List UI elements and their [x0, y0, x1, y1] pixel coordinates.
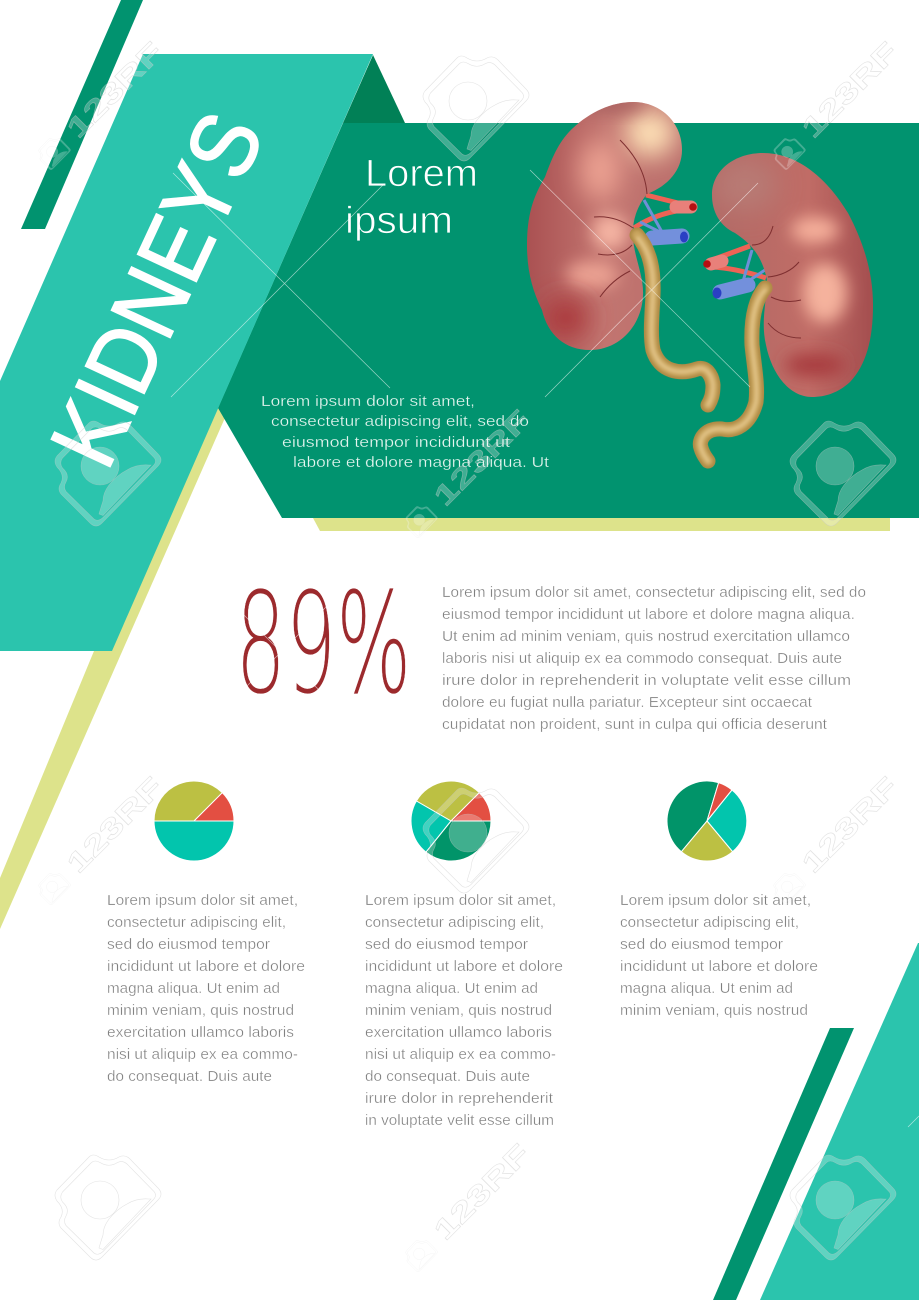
column text 2: nisi ut aliquip ex ea commo- — [365, 1047, 556, 1063]
big statistic: 89% — [236, 561, 411, 725]
column text 3: minim veniam, quis nostrud — [620, 1003, 808, 1019]
column text 1: incididunt ut labore et dolore — [107, 959, 305, 975]
column text 3: consectetur adipiscing elit, — [620, 915, 799, 931]
pie chart 2 — [411, 781, 491, 861]
column text 2: incididunt ut labore et dolore — [365, 959, 563, 975]
column text 1: consectetur adipiscing elit, — [107, 915, 286, 931]
statistic paragraph: dolore eu fugiat nulla pariatur. Excepteur sint occaecat — [442, 695, 812, 711]
statistic paragraph: cupidatat non proident, sunt in culpa qui officia deserunt — [442, 717, 827, 733]
top-left dark green stripe — [21, 0, 143, 229]
column text 2: Lorem ipsum dolor sit amet, — [365, 893, 556, 909]
column text 2: irure dolor in reprehenderit — [365, 1091, 553, 1107]
lime diagonal band — [0, 395, 235, 929]
panel text block: consectetur adipiscing elit, sed do — [271, 414, 529, 430]
column text 2: minim veniam, quis nostrud — [365, 1003, 552, 1019]
ribbon: title band — [0, 54, 373, 651]
statistic paragraph: eiusmod tempor incididunt ut labore et dolore magna aliqua. — [442, 607, 855, 623]
bottom-right dark green stripe — [713, 1028, 854, 1300]
column text 2: do consequat. Duis aute — [365, 1069, 530, 1085]
column text 1: Lorem ipsum dolor sit amet, — [107, 893, 298, 909]
column text 2 — [365, 893, 563, 1129]
statistic paragraph: laboris nisi ut aliquip ex ea commodo consequat. Duis aute — [442, 651, 842, 667]
left kidney — [527, 96, 682, 350]
right kidney vessels — [703, 246, 766, 298]
column text 2: sed do eiusmod tempor — [365, 937, 528, 953]
column text 1: minim veniam, quis nostrud — [107, 1003, 294, 1019]
column text 2: exercitation ullamco laboris — [365, 1025, 552, 1041]
right kidney — [712, 153, 873, 397]
panel heading: ipsum — [345, 200, 453, 242]
column text 3: magna aliqua. Ut enim ad — [620, 981, 793, 997]
ribbon fold — [343, 55, 405, 123]
column text 1: do consequat. Duis aute — [107, 1069, 272, 1085]
column text 2: magna aliqua. Ut enim ad — [365, 981, 538, 997]
title: KIDNEYS — [30, 97, 284, 481]
column text 1: exercitation ullamco laboris — [107, 1025, 294, 1041]
panel text block: eiusmod tempor incididunt ut — [282, 435, 510, 451]
bottom-right teal wedge — [760, 943, 919, 1300]
column text 3: incididunt ut labore et dolore — [620, 959, 818, 975]
column text 1 — [107, 893, 305, 1085]
pie chart 3 — [667, 781, 747, 861]
column text 2: in voluptate velit esse cillum — [365, 1113, 554, 1129]
column text 1: magna aliqua. Ut enim ad — [107, 981, 280, 997]
header panel — [218, 123, 919, 518]
statistic paragraph: Lorem ipsum dolor sit amet, consectetur adipiscing elit, sed do — [442, 585, 866, 601]
panel text block: Lorem ipsum dolor sit amet, — [261, 394, 475, 410]
left kidney vessels — [634, 195, 697, 242]
left ureter — [637, 235, 713, 405]
pie chart 1 — [154, 781, 234, 861]
statistic paragraph: irure dolor in reprehenderit in voluptate velit esse cillum — [442, 673, 851, 689]
statistic paragraph: Ut enim ad minim veniam, quis nostrud exercitation ullamco — [442, 629, 850, 645]
panel heading: Lorem — [365, 153, 478, 195]
panel text block — [261, 394, 549, 471]
column text 1: sed do eiusmod tempor — [107, 937, 270, 953]
panel heading — [345, 153, 478, 242]
column text 2: consectetur adipiscing elit, — [365, 915, 544, 931]
statistic paragraph — [442, 585, 866, 733]
illustration: kidneys — [527, 96, 873, 461]
column text 3 — [620, 893, 818, 1019]
column text 3: sed do eiusmod tempor — [620, 937, 783, 953]
panel text block: labore et dolore magna aliqua. Ut — [293, 455, 549, 471]
right ureter — [700, 288, 765, 461]
column text 3: Lorem ipsum dolor sit amet, — [620, 893, 811, 909]
lime shadow under header panel — [313, 518, 890, 531]
column text 1: nisi ut aliquip ex ea commo- — [107, 1047, 298, 1063]
